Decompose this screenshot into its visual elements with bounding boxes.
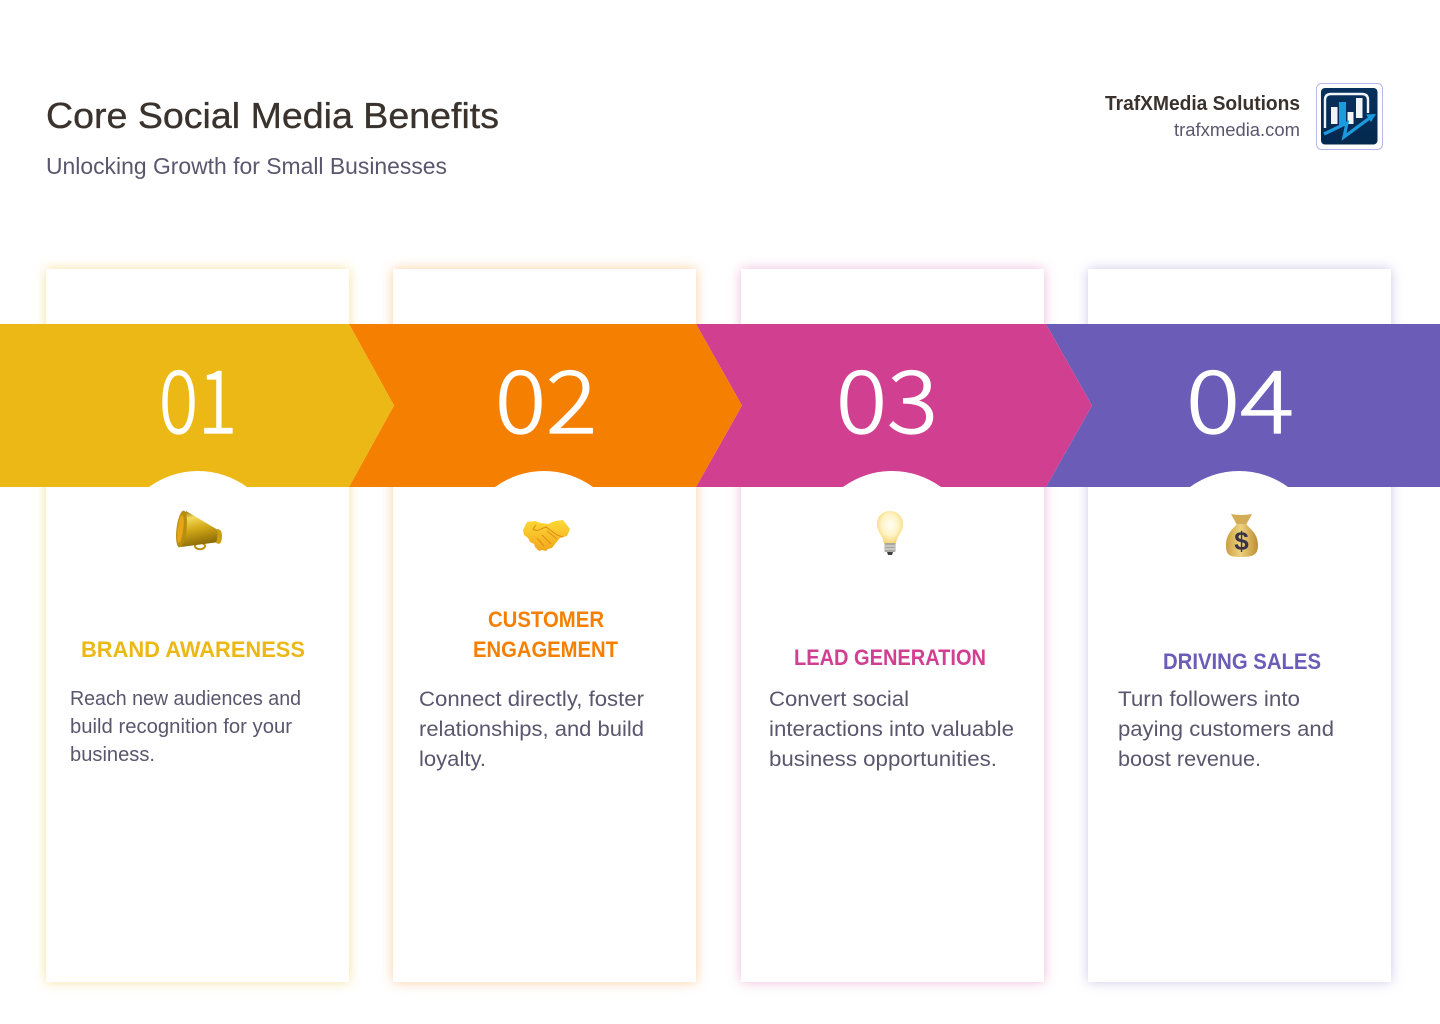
brand name: TrafXMedia Solutions: [1105, 93, 1300, 115]
icon notch 1: [149, 471, 247, 487]
heading: brand awareness: BRAND AWARENESS: [81, 637, 305, 662]
panel: card 3 background: [741, 269, 1044, 982]
panel: card 2 background: [393, 269, 696, 982]
panel: card 4 background: [1088, 269, 1391, 982]
description 2: Connect directly, foster: [419, 687, 644, 711]
icon: money bag: $: [1234, 526, 1249, 556]
description 4: paying customers and: [1118, 717, 1334, 741]
description 2: [419, 687, 644, 771]
number 03: 03: [836, 333, 938, 459]
card 2 text: [419, 607, 644, 771]
icon: handshake: [523, 520, 570, 551]
icon: money bag: [1226, 514, 1258, 557]
icon notch 2: [495, 471, 593, 487]
number 04: 04: [1186, 333, 1294, 459]
description 2: relationships, and build: [419, 717, 644, 741]
description 4: [1118, 687, 1334, 771]
card 4 text: [1118, 649, 1334, 771]
description 1: business.: [70, 743, 155, 766]
description 1: Reach new audiences and: [70, 687, 301, 710]
icon notch 4: [1190, 471, 1288, 487]
card 1 text: [70, 637, 305, 766]
icon: light bulb: [877, 511, 903, 555]
arrow: step 1: [0, 324, 394, 487]
heading: customer engagement: ENGAGEMENT: [473, 637, 618, 662]
description 4: Turn followers into: [1118, 687, 1300, 711]
description 3: interactions into valuable: [769, 717, 1014, 741]
card 3 text: [769, 645, 1014, 771]
panel: card 1 background: [46, 269, 349, 982]
brand url: trafxmedia.com: [1174, 119, 1300, 140]
description 3: [769, 687, 1014, 771]
heading: customer engagement: CUSTOMER: [488, 607, 604, 632]
heading: driving sales: DRIVING SALES: [1163, 649, 1321, 674]
description 2: loyalty.: [419, 747, 486, 771]
brand block: [1105, 84, 1382, 150]
heading: lead generation: LEAD GENERATION: [794, 645, 986, 670]
icon notch 3: [843, 471, 941, 487]
arrow: step 4: [1046, 324, 1440, 487]
description 1: build recognition for your: [70, 715, 292, 738]
arrow: step 3: [696, 324, 1092, 487]
icon: brand logo: [1316, 84, 1382, 150]
icon: megaphone: [174, 510, 222, 549]
number 01: 01: [159, 333, 237, 459]
heading: customer engagement: [473, 607, 618, 662]
description 4: boost revenue.: [1118, 747, 1261, 771]
arrow: step 2: [349, 324, 742, 487]
number 02: 02: [495, 333, 597, 459]
description 3: Convert social: [769, 687, 909, 711]
arrow ribbon: [0, 324, 1440, 487]
subtitle: Unlocking Growth for Small Businesses: [46, 153, 447, 179]
description 3: business opportunities.: [769, 747, 997, 771]
title: Core Social Media Benefits: [46, 95, 499, 136]
description 1: [70, 687, 301, 766]
